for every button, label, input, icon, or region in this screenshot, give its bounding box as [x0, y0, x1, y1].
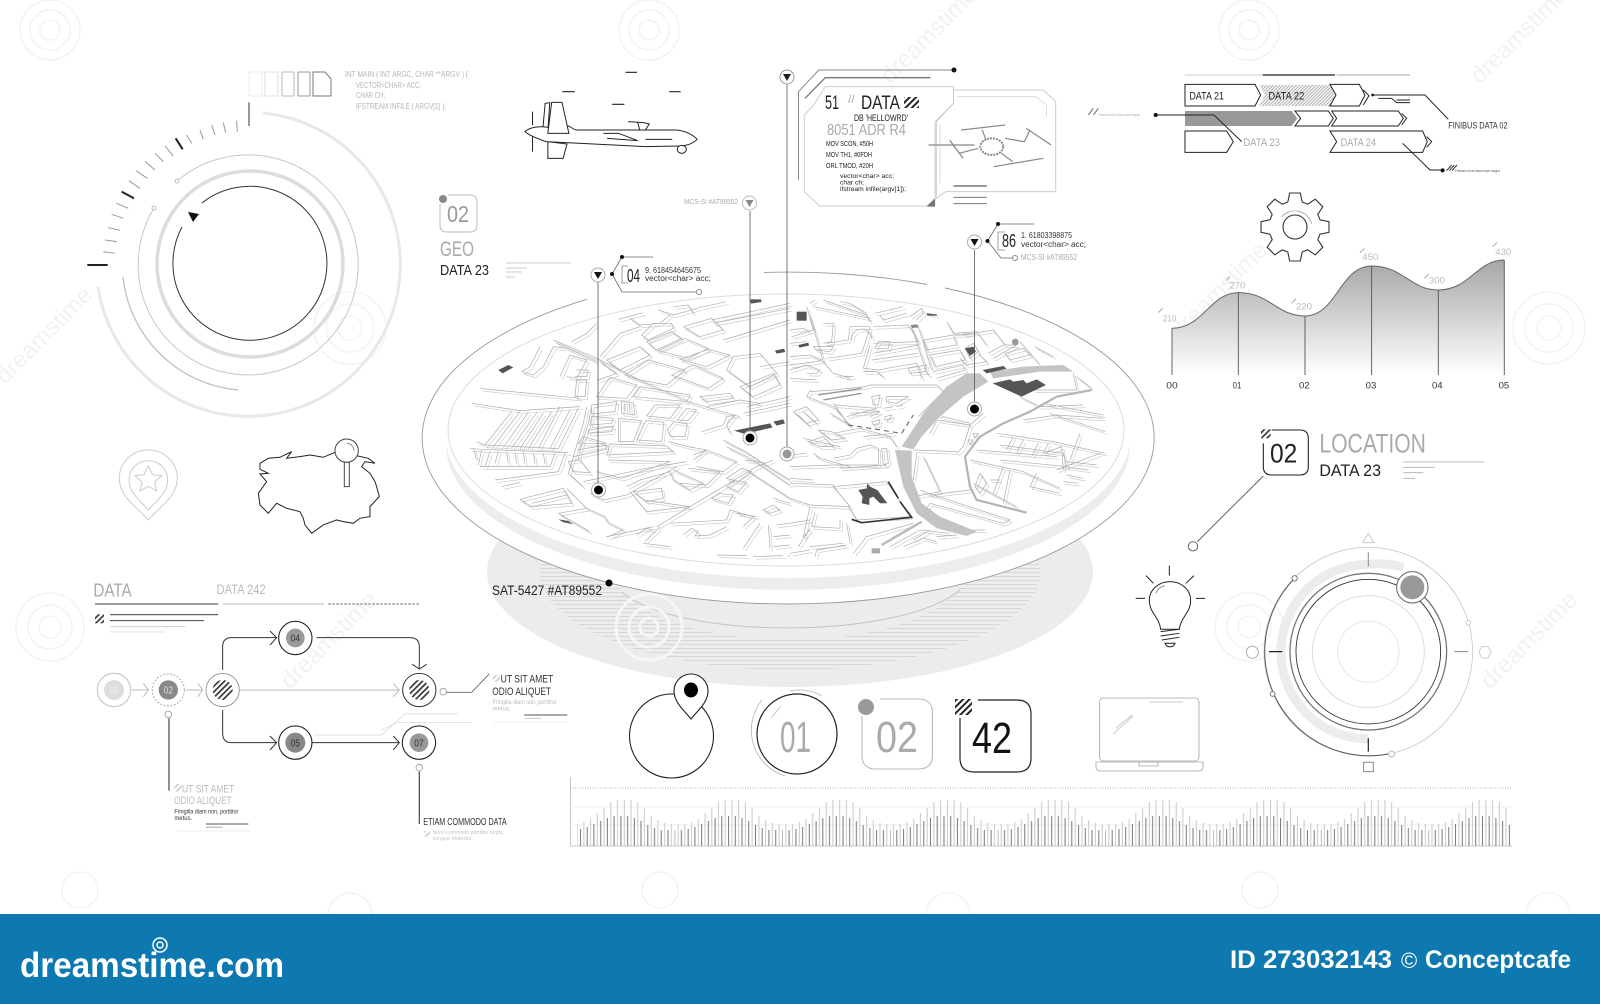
dot: [858, 699, 874, 715]
map dark buildings east: [797, 312, 1046, 505]
disc surface: [445, 290, 1131, 578]
location panel: [1136, 428, 1491, 772]
logo spiral: [153, 938, 167, 952]
card text: 51: [825, 93, 839, 114]
note right text: metus.: [493, 707, 511, 713]
east street lines: [790, 300, 1105, 557]
pin dot: [684, 682, 698, 698]
marker 86: [968, 402, 982, 416]
note stem right: [440, 674, 489, 695]
box: [862, 699, 932, 769]
leader end: [1188, 542, 1198, 551]
bar labels: [1098, 90, 1508, 173]
callout dots: [986, 222, 1018, 260]
axis labels: 05: [1499, 380, 1509, 390]
small dots: [1270, 576, 1471, 757]
leader: [1197, 476, 1263, 542]
callout wires: [988, 224, 1034, 258]
heading rules: [95, 604, 420, 632]
disc body: [422, 272, 1154, 604]
radial dial panel: [87, 70, 468, 416]
code text: IFSTREAM INFILE ( ARGV[1] );: [356, 102, 446, 111]
center ring: [1338, 621, 1399, 682]
light connectors: [132, 683, 399, 697]
inner ring: [1296, 579, 1441, 724]
knob: [1397, 572, 1428, 603]
inner black arc: [173, 186, 327, 340]
badge 02 box: [858, 699, 932, 769]
icon: gear: [1261, 193, 1329, 261]
waveform chart: [570, 776, 1512, 846]
note right text: Fringilla diam non, porttitor: [493, 700, 557, 706]
badge 02: [440, 195, 477, 232]
gray bar: [1185, 111, 1297, 126]
satellite label: [492, 580, 612, 598]
axis: [570, 777, 1512, 846]
node 05: 05: [291, 738, 300, 749]
shadow under disc: [487, 539, 1093, 687]
shadow arc: [623, 590, 960, 628]
note bottom text: congue molestie.: [433, 836, 473, 842]
shadow hatching: [540, 560, 1040, 669]
card dot: [952, 68, 956, 72]
watermark words: [0, 0, 1583, 694]
hatch: [955, 699, 972, 715]
callout text: 1. 61803398875: [1021, 231, 1072, 240]
bar labels: DATA 21: [1189, 90, 1224, 102]
author: Conceptcafe: [1425, 946, 1571, 974]
number: 01: [780, 713, 811, 762]
location badge: [1263, 430, 1308, 475]
footer band: [0, 914, 1600, 1004]
bar labels: DATA 22: [1268, 90, 1304, 102]
outer ring dark part: [1265, 578, 1392, 756]
axis labels: [1166, 380, 1509, 390]
callout text: [645, 266, 711, 283]
data card: [799, 68, 1056, 207]
chart area fill: [1172, 260, 1504, 375]
GEO label: GEO: [440, 238, 474, 261]
hospital frame: [852, 482, 912, 523]
card text: char ch;: [840, 180, 864, 186]
code text: [345, 70, 468, 111]
card text: vector<char> acc;: [840, 173, 894, 180]
card text: MOV TH1, #0FDH: [826, 152, 872, 159]
icon: light bulb: [1136, 566, 1205, 647]
fading boxes: [249, 72, 331, 96]
pin circle badge: [630, 674, 714, 778]
card text: //: [848, 92, 855, 106]
triangle glyph: [1363, 533, 1374, 543]
line MCS: [749, 211, 751, 438]
card text: MOV SCON, #50H: [826, 141, 873, 148]
note 02 text: metus.: [174, 816, 193, 822]
location title: LOCATION: [1319, 428, 1426, 458]
node 05: [279, 726, 312, 759]
callout 86: [986, 222, 1086, 262]
compass band: [1281, 564, 1403, 739]
square marker: [872, 548, 880, 553]
bar labels: FINIBUS DATA 02: [1448, 120, 1508, 130]
disc inner line: [448, 294, 1124, 566]
dashed wall: [848, 415, 913, 433]
marker MCS: [743, 431, 757, 445]
gray block: [911, 324, 919, 328]
value labels: 300: [1429, 275, 1445, 285]
hexagon glyph: [1479, 647, 1491, 658]
code text: CHAR CH;: [356, 91, 385, 100]
river: [895, 365, 1073, 536]
callout 04: [610, 255, 711, 294]
card text: [825, 92, 908, 193]
logo text: dreamstime.com: [20, 946, 284, 985]
node 02: 02: [164, 686, 173, 697]
card text: ifstream infile(argv[1]);: [840, 186, 906, 193]
card frame lines: [799, 70, 1056, 207]
code text: INT MAIN ( INT ARGC, CHAR **ARGV ) {: [345, 70, 468, 79]
value labels: 430: [1495, 247, 1511, 257]
compass dial: [1246, 533, 1491, 772]
node 07: 07: [414, 738, 424, 749]
box: [960, 700, 1031, 772]
note bottom text: [423, 817, 507, 842]
marker card: [780, 447, 794, 461]
connectors: [223, 631, 427, 750]
pin lines: [591, 70, 982, 497]
map dark buildings west: [498, 299, 785, 524]
bars: [577, 776, 1512, 846]
glare: [771, 706, 781, 718]
chevron outlines: [1088, 84, 1457, 171]
panel headings: [93, 580, 266, 601]
callout text: vector<char> acc;: [1021, 240, 1086, 249]
value labels: 270: [1229, 280, 1245, 290]
map streets east: [790, 300, 1107, 559]
DATA 23 label: DATA 23: [440, 262, 489, 279]
outer ring: [1264, 547, 1473, 756]
value labels: 220: [1296, 301, 1312, 311]
shadow watermark: [616, 594, 682, 660]
guide lines: [570, 807, 1512, 825]
drone illustration: [525, 72, 697, 158]
panel headings: DATA: [93, 580, 132, 601]
thick gray ring: [157, 171, 343, 357]
watermark words: dreamstime: [1165, 236, 1273, 344]
badge 42 box: [955, 699, 1031, 772]
thin ring: [138, 155, 358, 375]
hatch square: [95, 614, 104, 623]
dotted top line: [570, 787, 1512, 789]
value labels: [1163, 247, 1511, 324]
code text: VECTOR<CHAR> ACC;: [356, 81, 421, 90]
callout number: 86: [1002, 231, 1016, 251]
icon top 86: [968, 235, 982, 249]
chart line: [1172, 260, 1504, 328]
circle glyph: [1246, 646, 1258, 658]
watermark words: dreamstime: [275, 586, 383, 694]
note bottom text: ETIAM COMMODO DATA: [423, 817, 507, 828]
icon: star pin: [119, 450, 177, 520]
value labels: 210: [1163, 314, 1176, 324]
card text: 8051 ADR R4: [827, 122, 906, 139]
badge dot: [439, 195, 447, 203]
callout text: 9. 618454645675: [645, 266, 701, 275]
axis labels: 01: [1233, 380, 1241, 390]
callout text: [1021, 231, 1086, 262]
callout number: 04: [627, 266, 640, 286]
bar labels: Praesent sit at ullamcorper magna: [1098, 113, 1140, 117]
east street double edge: [792, 303, 1107, 559]
rule lines: [506, 263, 571, 277]
node 07: [402, 726, 436, 759]
GEO heading block: [439, 195, 571, 279]
callout bracket: [998, 232, 1005, 250]
circle: [630, 694, 714, 778]
callout text: MCS-SI #AT89552: [1021, 253, 1077, 262]
top-right chevron bars: [1088, 75, 1508, 173]
west street double edge: [472, 304, 792, 559]
node 04: 04: [291, 634, 300, 645]
axis labels: 00: [1166, 380, 1178, 390]
card text: DATA: [861, 93, 900, 114]
core ring: [1312, 596, 1424, 708]
outer arcs: [751, 690, 822, 776]
slashes: [1158, 242, 1497, 313]
card text: ORL TMOD, #20H: [826, 163, 873, 170]
copyright: ©: [1401, 948, 1417, 973]
canal: [965, 390, 1092, 513]
sat dot: [606, 580, 612, 586]
top rules: [1185, 74, 1262, 76]
line 86: [974, 250, 976, 409]
icon top card: [780, 70, 794, 84]
outer outline with gaps: [422, 272, 1154, 604]
node 02: [152, 674, 184, 706]
MCS label: MCS-SI #AT89552: [684, 197, 738, 206]
id text: ID 273032143: [1230, 946, 1392, 974]
value stems: [1172, 260, 1504, 375]
note 02 text: ODIO ALIQUET: [174, 795, 232, 807]
line 04: [597, 282, 599, 490]
callout bracket: [622, 266, 628, 283]
panel headings: DATA 242: [217, 581, 266, 597]
leader dots: [1154, 94, 1445, 172]
ticks: [1368, 552, 1468, 652]
callout wires: [612, 257, 696, 292]
note 02 text: [174, 783, 250, 831]
bar labels: DATA 23: [1243, 137, 1280, 149]
note bottom text: Nunc commodo porttitor turpis,: [433, 830, 504, 836]
tick marks: [87, 102, 249, 265]
map streets west: [470, 299, 792, 559]
watermark words: dreamstime: [1475, 586, 1583, 694]
callout text: vector<char> acc;: [645, 274, 711, 283]
hatch icon: [904, 97, 919, 108]
arrow head: [188, 212, 199, 222]
outer light arc: [98, 113, 400, 416]
note 02 text: Fringilla diam non, porttitor: [174, 809, 238, 815]
square glyph: [1364, 762, 1373, 772]
icon: laptop: [1096, 698, 1203, 771]
rim crescent: [446, 300, 1130, 590]
location number: 02: [1270, 439, 1297, 469]
central map disc: [422, 272, 1154, 604]
axis labels: 02: [1299, 380, 1310, 390]
pin: [674, 674, 708, 719]
number: 42: [972, 714, 1012, 763]
badge 01: [751, 690, 837, 776]
location rules: [1403, 462, 1484, 478]
ring: [757, 694, 837, 774]
icon top 04: [591, 268, 605, 282]
gray dot: [1012, 339, 1019, 345]
value labels: 450: [1362, 252, 1378, 262]
footer background: [0, 914, 1600, 1004]
knob core: [1400, 575, 1424, 599]
area chart: [1158, 242, 1511, 390]
marker 04: [592, 483, 606, 497]
flow diagram panel: [93, 580, 567, 842]
shadow core: [615, 500, 965, 640]
road gray: [882, 522, 922, 545]
node 01: [97, 673, 131, 707]
quadcopter: [929, 125, 1051, 167]
west street lines: [470, 302, 790, 557]
card text: DB 'HELLOWRD': [854, 113, 908, 124]
note stem bottom: [416, 764, 423, 824]
middle gray arc: [123, 277, 238, 390]
axis labels: 03: [1366, 380, 1376, 390]
dark ticks: [1269, 652, 1368, 752]
main rings: [1290, 573, 1447, 730]
number: 02: [876, 713, 918, 762]
location hatch: [1261, 429, 1271, 438]
note right text: ODIO ALIQUET: [492, 686, 551, 698]
note right text: [492, 674, 567, 722]
hatched chevron: [1259, 85, 1335, 106]
icon: region map with magnifier: [258, 439, 379, 533]
icon top MCS: [742, 196, 756, 210]
callout dots: [610, 255, 702, 294]
bar labels: Praesent sit at ullamcorper magna: [1455, 169, 1500, 173]
line card: [786, 84, 788, 454]
bar labels: DATA 24: [1341, 137, 1376, 149]
shadow ellipse: [487, 457, 1093, 687]
axis labels: 04: [1432, 380, 1443, 390]
museum gray band: [818, 388, 862, 400]
note 02 text: UT SIT AMET: [182, 783, 235, 795]
node 04: [279, 621, 312, 655]
note right text: UT SIT AMET: [501, 674, 554, 686]
ring end dots: [152, 179, 179, 210]
decorative traces: [313, 714, 472, 735]
node 06 hatched: [403, 673, 436, 707]
note stem 02: [165, 711, 172, 791]
sat text: SAT-5427 #AT89552: [492, 582, 602, 598]
node 03 hatched: [206, 673, 239, 707]
location sub: DATA 23: [1319, 461, 1381, 480]
badge number: 02: [447, 201, 469, 227]
node 01: 01: [110, 686, 118, 697]
